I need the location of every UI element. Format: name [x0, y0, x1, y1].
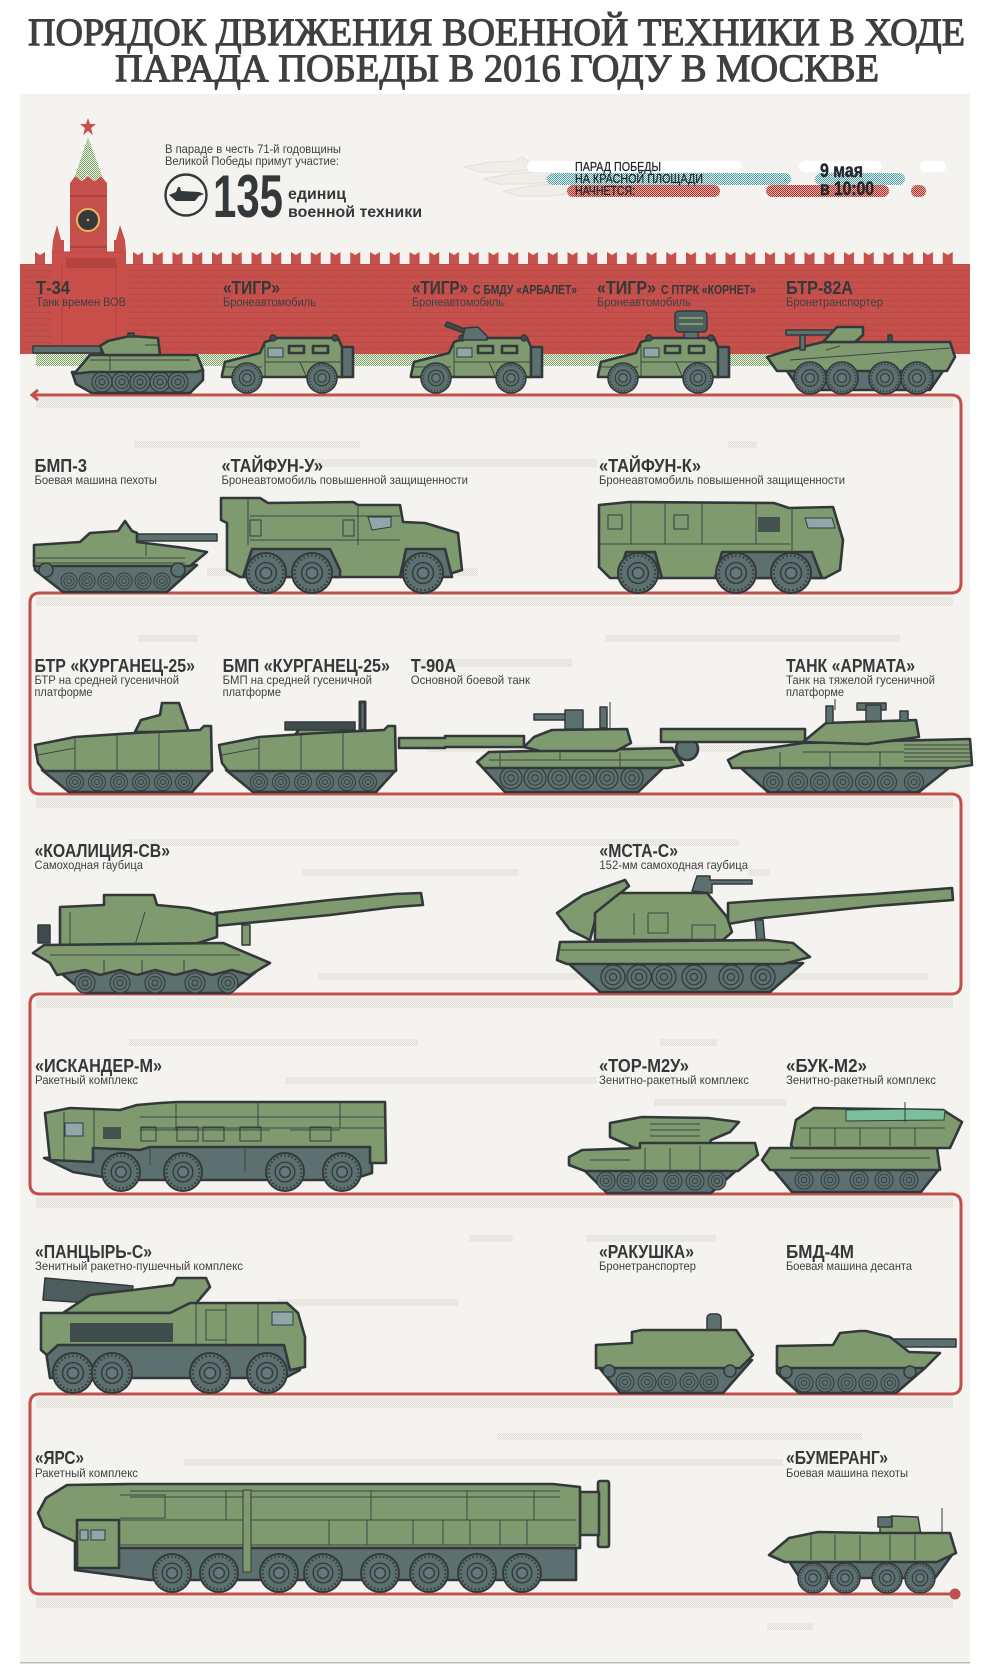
- header lead text: Великой Победы примут участие:: [165, 154, 339, 168]
- vehicle: Tigr with Arbalet: [411, 322, 542, 393]
- parade announcement text: ПАРАД ПОБЕДЫ: [575, 160, 661, 174]
- label: Pantsir-S: [35, 1242, 243, 1273]
- label: Tor-M2U: [599, 1056, 749, 1087]
- label: T-34: Танк времен ВОВ: [36, 295, 126, 309]
- vehicle: Yars: [38, 1481, 609, 1592]
- label: Boomerang: Боевая машина пехоты: [786, 1466, 908, 1480]
- vehicle: BMP-3: [34, 521, 217, 592]
- label: Buk-M2: [786, 1056, 936, 1087]
- vehicle: Koalitsiya-SV: [33, 893, 423, 993]
- label: BMP Kurganets-25: [223, 656, 390, 699]
- kremlin wall: [20, 252, 970, 366]
- vehicle: Boomerang: [769, 1508, 956, 1593]
- label: BMP Kurganets-25: БМП на средней гусеничной: [223, 673, 372, 687]
- label: Typhoon-K: Бронеавтомобиль повышенной защищенности: [599, 473, 845, 487]
- vehicle: BMP Kurganets-25: [219, 702, 396, 792]
- label: Tigr Arbalet: С БМДУ «АРБАЛЕТ»: [473, 283, 577, 297]
- label: Tigr Arbalet: Бронеавтомобиль: [412, 295, 504, 309]
- label: Armata: платформе: [786, 685, 844, 699]
- vehicle: Typhoon-K: [599, 502, 843, 593]
- label: Tigr: «ТИГР»: [223, 278, 280, 298]
- label: Iskander-M: «ИСКАНДЕР-М»: [35, 1056, 162, 1076]
- label: Rakushka: Бронетранспортер: [599, 1259, 696, 1273]
- label: Msta-S: [599, 841, 748, 872]
- label: Koalitsiya-SV: Самоходная гаубица: [34, 858, 143, 872]
- label: Rakushka: [599, 1242, 696, 1273]
- label: BTR-82A: БТР-82А: [786, 278, 853, 298]
- title: [28, 11, 965, 90]
- vehicle: Iskander-M: [44, 1102, 386, 1191]
- vehicle: Rakushka: [596, 1314, 753, 1393]
- label: BTR Kurganets-25: [34, 656, 195, 699]
- label: BMP-3: Боевая машина пехоты: [34, 473, 157, 487]
- label: Tigr Kornet: «ТИГР»: [597, 278, 656, 298]
- coloured strips behind date: [527, 161, 946, 197]
- label: T-90A: [411, 656, 531, 687]
- label: Boomerang: «БУМЕРАНГ»: [786, 1448, 888, 1468]
- label: Tigr Arbalet: [412, 278, 577, 309]
- icon: aircraft formation: [465, 157, 566, 196]
- label: BTR-82A: Бронетранспортер: [786, 295, 883, 309]
- spasskaya tower: [52, 118, 126, 354]
- vehicle: Typhoon-U: [221, 498, 462, 593]
- label: Buk-M2: Зенитно-ракетный комплекс: [786, 1073, 936, 1087]
- label: Yars: Ракетный комплекс: [35, 1466, 138, 1480]
- parade announcement text: [575, 160, 703, 198]
- label: T-90A: Основной боевой танк: [411, 673, 531, 687]
- label: Typhoon-U: «ТАЙФУН-У»: [222, 455, 323, 476]
- header lead text: [165, 142, 341, 168]
- label: Msta-S: «МСТА-С»: [599, 841, 678, 861]
- title: ПОРЯДОК ДВИЖЕНИЯ ВОЕННОЙ ТЕХНИКИ В ХОДЕ: [28, 11, 965, 54]
- header lead text: В параде в честь 71-й годовщины: [165, 142, 341, 156]
- parade date and time: в 10:00: [820, 179, 874, 200]
- label: Tigr Kornet: С ПТРК «КОРНЕТ»: [661, 283, 756, 297]
- title: ПАРАДА ПОБЕДЫ В 2016 ГОДУ В МОСКВЕ: [115, 47, 879, 90]
- label: Rakushka: «РАКУШКА»: [599, 1242, 694, 1262]
- vehicle: T-90A: [399, 702, 683, 792]
- vehicle: Buk-M2: [762, 1102, 962, 1192]
- label: Typhoon-U: Бронеавтомобиль повышенной защищенности: [222, 473, 468, 487]
- vehicle: Tor-M2U: [569, 1117, 758, 1193]
- bottom rule: [20, 1662, 970, 1664]
- label: T-90A: Т-90А: [411, 656, 456, 676]
- big number 135: 135: [213, 163, 283, 230]
- label: BMD-4M: Боевая машина десанта: [786, 1259, 912, 1273]
- label: Tigr Kornet: Бронеавтомобиль: [597, 295, 691, 309]
- vehicle: Tigr with Kornet: [598, 311, 729, 393]
- label: Iskander-M: [35, 1056, 162, 1087]
- label: Yars: [35, 1448, 138, 1480]
- units caption: единиц: [288, 186, 346, 203]
- label: BTR Kurganets-25: БТР на средней гусеничной: [34, 673, 179, 687]
- parade date and time: 9 мая: [820, 161, 863, 182]
- label: Msta-S: 152-мм самоходная гаубица: [599, 858, 748, 872]
- label: BMD-4M: [786, 1242, 912, 1273]
- parade date and time: [820, 161, 874, 200]
- label: Boomerang: [786, 1448, 908, 1480]
- label: BTR Kurganets-25: БТР «КУРГАНЕЦ-25»: [34, 656, 195, 676]
- label: Tigr Kornet: [597, 278, 756, 309]
- label: Armata: Танк на тяжелой гусеничной: [786, 673, 935, 687]
- parade announcement text: НА КРАСНОЙ ПЛОЩАДИ: [575, 171, 703, 186]
- label: Typhoon-U: [222, 455, 468, 487]
- label: T-34: [36, 278, 126, 309]
- label: BMP-3: [34, 456, 157, 487]
- label: Tigr: [223, 278, 316, 309]
- parade announcement text: НАЧНЕТСЯ:: [575, 184, 635, 198]
- label: Buk-M2: «БУК-М2»: [786, 1056, 867, 1076]
- units caption: [288, 186, 422, 221]
- label: Pantsir-S: Зенитный ракетно-пушечный комплекс: [35, 1259, 243, 1273]
- vehicle: Armata: [661, 699, 972, 792]
- vehicle: Msta-S: [557, 876, 953, 992]
- label: Iskander-M: Ракетный комплекс: [35, 1073, 138, 1087]
- vehicle: BTR-82A: [767, 327, 955, 394]
- vehicle: Tigr: [222, 335, 353, 393]
- label: Armata: [786, 656, 935, 699]
- units caption: военной техники: [288, 204, 422, 221]
- label: BMP Kurganets-25: БМП «КУРГАНЕЦ-25»: [223, 656, 390, 676]
- route track line with arrow: [30, 390, 961, 1600]
- label: Yars: «ЯРС»: [35, 1448, 84, 1468]
- label: BTR-82A: [786, 278, 883, 309]
- label: BMD-4M: БМД-4М: [786, 1242, 854, 1262]
- label: Typhoon-K: «ТАЙФУН-К»: [599, 455, 701, 476]
- vehicle: BMD-4M: [777, 1331, 956, 1393]
- label: Tor-M2U: «ТОР-М2У»: [599, 1056, 689, 1076]
- label: BTR Kurganets-25: платформе: [34, 685, 93, 699]
- label: Pantsir-S: «ПАНЦЫРЬ-С»: [35, 1242, 152, 1262]
- label: Koalitsiya-SV: [34, 841, 170, 872]
- label: Typhoon-K: [599, 455, 845, 487]
- dotted texture bands: [36, 397, 953, 1630]
- label: Koalitsiya-SV: «КОАЛИЦИЯ-СВ»: [34, 841, 170, 861]
- vehicle: Pantsir-S: [41, 1278, 305, 1393]
- label: Tor-M2U: Зенитно-ракетный комплекс: [599, 1073, 749, 1087]
- label: BMP-3: БМП-3: [34, 456, 87, 476]
- label: Tigr: Бронеавтомобиль: [223, 295, 316, 309]
- label: Armata: ТАНК «АРМАТА»: [786, 656, 915, 676]
- vehicle: T-34: [33, 333, 203, 393]
- label: T-34: Т-34: [36, 278, 70, 298]
- label: Tigr Arbalet: «ТИГР»: [412, 278, 468, 298]
- label: BMP Kurganets-25: платформе: [223, 685, 281, 699]
- vehicle: BTR Kurganets-25: [35, 703, 212, 792]
- icon: tank in circle: [166, 174, 206, 216]
